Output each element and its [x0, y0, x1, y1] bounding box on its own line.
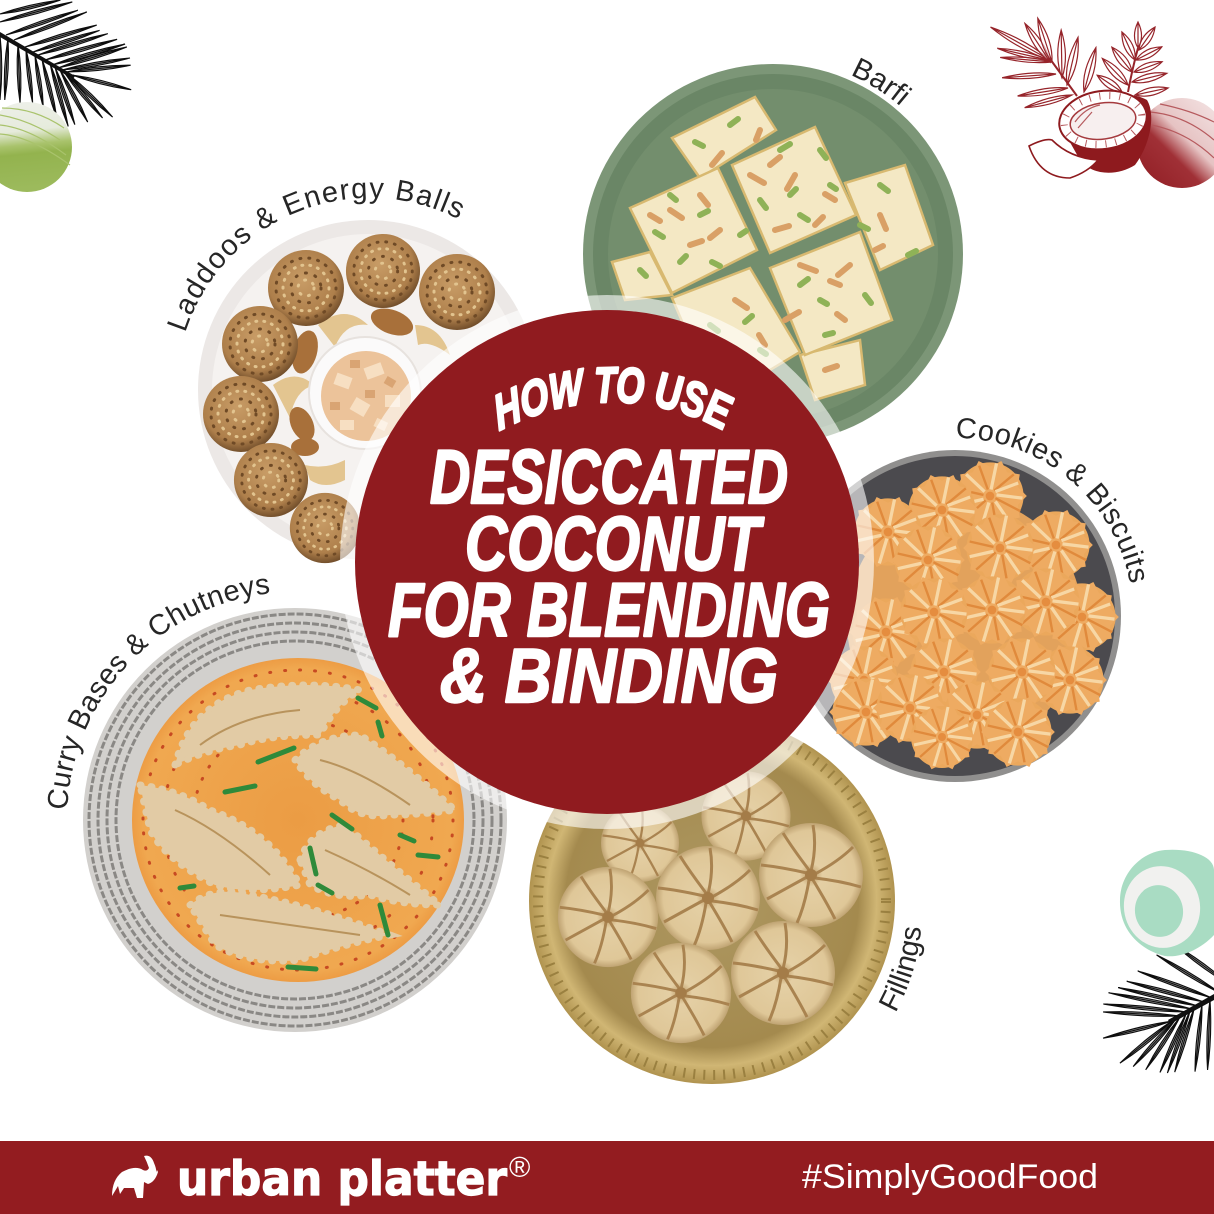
- panel: cookies plate: [789, 450, 1121, 782]
- heading: desiccated coconut for blending and binding: DESICCATED: [430, 435, 788, 520]
- panel: laddoos plate: [198, 220, 538, 563]
- label: Barfi: Barfi: [852, 58, 912, 106]
- heading: how to use: HOW TO USE: [495, 366, 735, 432]
- icon: mint coconut: [1116, 850, 1214, 956]
- label: Cookies and Biscuits: Cookies & Biscuits: [957, 418, 1144, 582]
- macaroon cookies: [827, 461, 1119, 769]
- hashtag: #SimplyGoodFood: [802, 1158, 1098, 1196]
- icon: black palm frond bottom right: [1103, 944, 1214, 1074]
- panel: curry plate: [83, 608, 507, 1032]
- heading: desiccated coconut for blending and binding: FOR BLENDING: [388, 568, 830, 653]
- dumplings: [140, 685, 455, 961]
- far whole coconut in red: [1137, 98, 1214, 188]
- icon: green coconut: [0, 102, 72, 192]
- nuts: [273, 303, 450, 485]
- cut half coconut shell: [1055, 85, 1151, 173]
- palm leaves in red: [989, 17, 1169, 110]
- label: Laddoos and Energy Balls: Laddoos & Energy Balls: [167, 180, 463, 331]
- icon: elephant logo: [112, 1156, 158, 1198]
- heading: desiccated coconut for blending and binding: [388, 435, 830, 719]
- bowl of jaggery: [309, 337, 421, 449]
- panel: fillings plate: [529, 718, 895, 1084]
- panel: central title circle: [340, 295, 874, 829]
- laddoo balls: [203, 234, 495, 563]
- panel: barfi plate: [583, 64, 963, 444]
- coconut slice: [1029, 140, 1098, 178]
- heading: desiccated coconut for blending and binding: COCONUT: [465, 502, 764, 587]
- barfi pieces: [612, 97, 933, 400]
- heading: desiccated coconut for blending and binding: & BINDING: [440, 634, 778, 719]
- icon: black palm frond top left: [0, 0, 132, 127]
- brand name: urban platter: [177, 1152, 508, 1207]
- labels: [48, 58, 1144, 1012]
- icon: red coconut illustration top right: [989, 17, 1214, 188]
- pistachio and almond toppings: [640, 119, 916, 370]
- label: Curry Bases and Chutneys: Curry Bases & Chutneys: [48, 578, 270, 808]
- label: Fillings: Fillings: [878, 927, 924, 1012]
- modaks: [558, 771, 863, 1043]
- scallions: [180, 698, 438, 969]
- spice speckles: [143, 670, 453, 970]
- registered mark: ®: [509, 1152, 530, 1184]
- footer band: [0, 1141, 1214, 1214]
